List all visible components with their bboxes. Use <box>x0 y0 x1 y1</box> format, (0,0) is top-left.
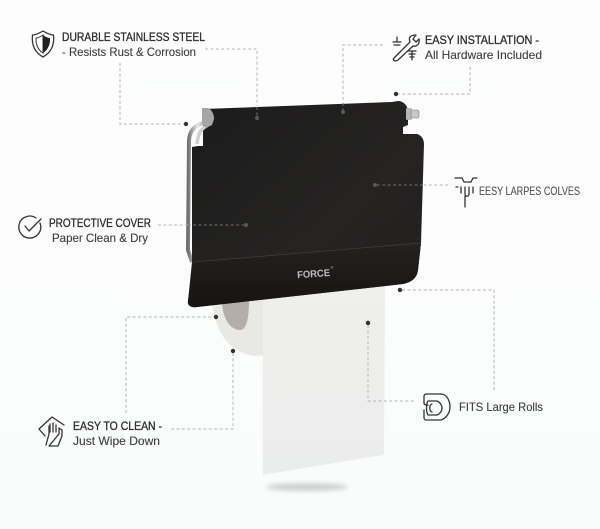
callout: durable stainless steel: - Resists Rust & Corrosion <box>62 45 196 59</box>
toilet paper roll <box>212 300 268 356</box>
icon: wrench and screw <box>393 35 419 61</box>
callout: easy to clean: EASY TO CLEAN - <box>73 419 162 433</box>
icon: paper roll <box>424 394 450 420</box>
callout: fits large rolls <box>366 288 543 420</box>
holder: black cover panel <box>188 101 424 307</box>
callout: easy installation: EASY INSTALLATION - <box>425 33 539 47</box>
holder: lower flap <box>188 243 421 307</box>
callout: easy to clean <box>39 315 235 448</box>
callout: easy installation: All Hardware Included <box>425 48 542 62</box>
holder: chrome rod <box>188 122 207 262</box>
callout: durable stainless steel: DURABLE STAINLESS STEEL <box>62 30 205 44</box>
logo registered mark: ® <box>330 265 334 270</box>
callout: durable stainless steel <box>32 30 259 126</box>
icon: wiping hand <box>39 417 64 446</box>
callout: fits large rolls: FITS Large Rolls <box>459 400 543 414</box>
callout: protective cover: Paper Clean & Dry <box>52 231 148 245</box>
callout: easy to clean: Just Wipe Down <box>73 434 160 448</box>
roll core hole <box>222 300 249 330</box>
flap highlight <box>193 243 421 262</box>
icon: check circle <box>19 216 41 238</box>
callout: eesy larpes colves <box>373 178 580 207</box>
callout: protective cover: PROTECTIVE COVER <box>49 216 151 230</box>
hanging paper sheet <box>263 285 385 476</box>
brand logo: FORCE <box>297 268 331 281</box>
icon: bracket glyph <box>455 178 477 207</box>
callout: protective cover <box>19 216 248 245</box>
callout: easy installation <box>341 33 542 114</box>
icon: shield <box>32 31 54 57</box>
holder: chrome bracket and bolt <box>197 108 419 144</box>
shadow under paper <box>266 483 348 491</box>
